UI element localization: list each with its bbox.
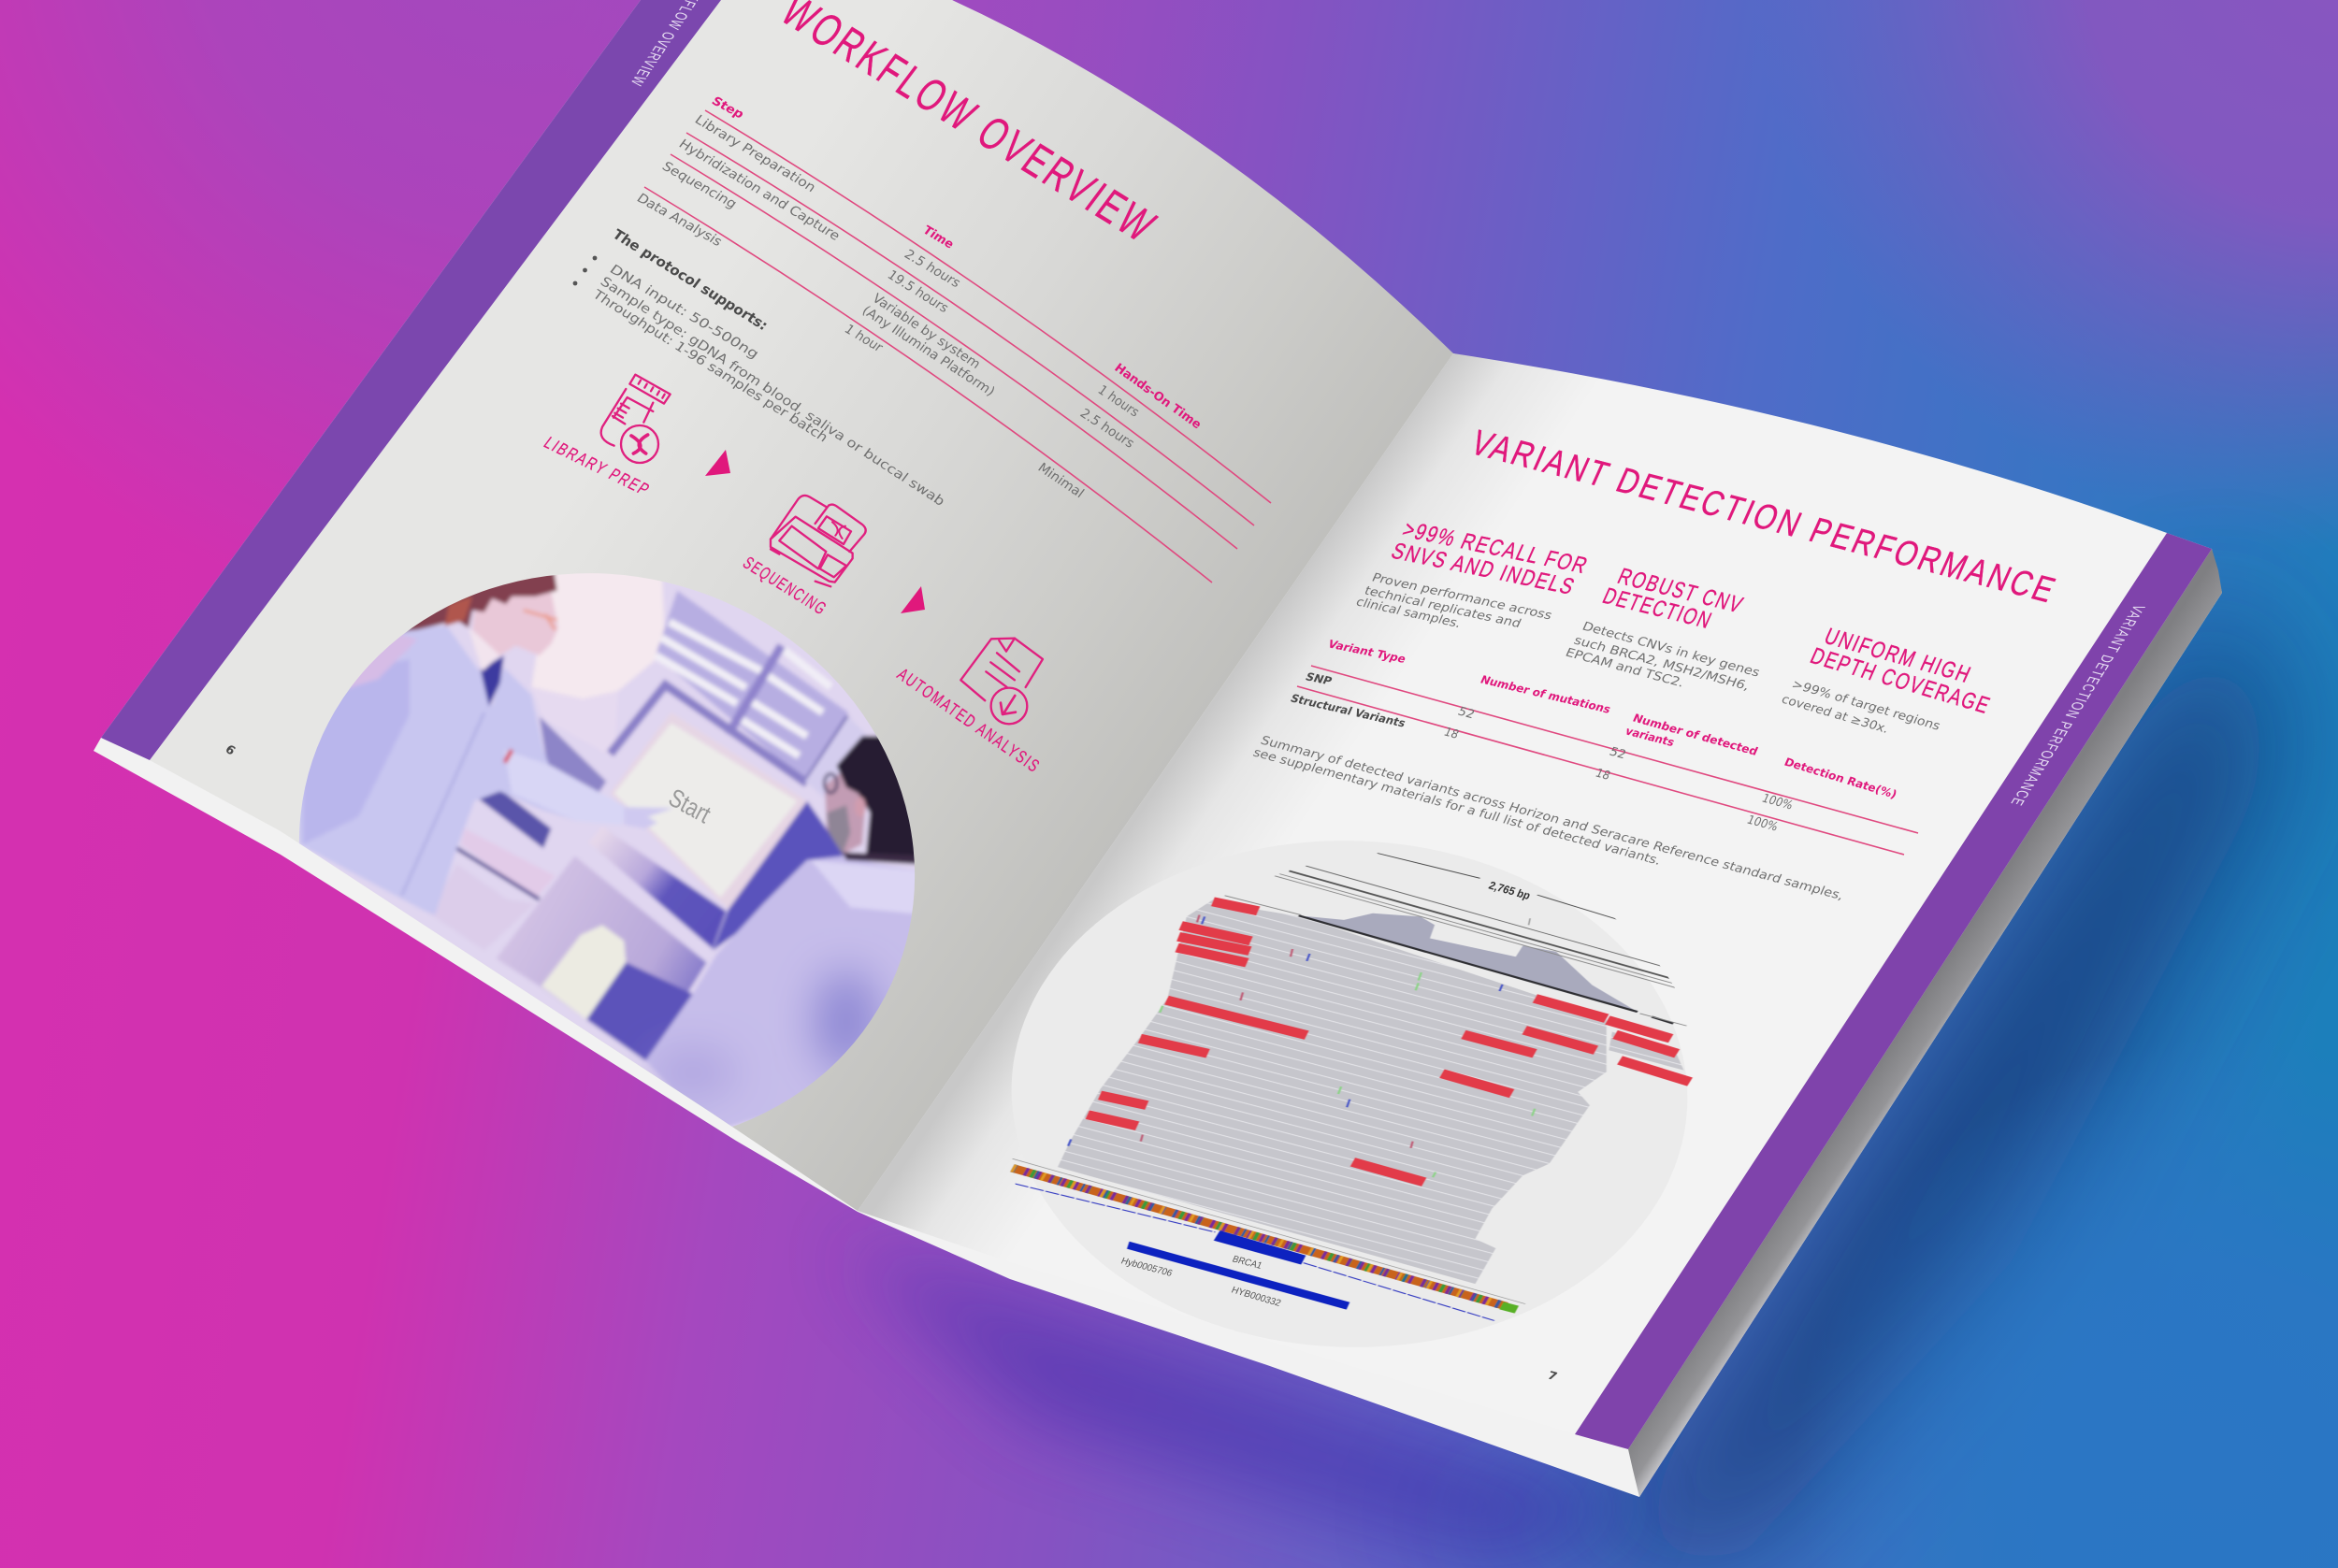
- workflow table: Variable by system: [870, 291, 983, 372]
- woman lab coat: [299, 625, 556, 914]
- variant table: Variant Type: [1326, 637, 1408, 666]
- icon: library prep tube: [601, 375, 671, 463]
- workflow table: (Any Illumina Platform): [859, 303, 998, 399]
- left purple strip: [101, 0, 721, 760]
- icon: automated analysis document: [960, 639, 1043, 724]
- variant table: 18: [1441, 725, 1461, 741]
- panel: genome browser circle: [920, 770, 1779, 1418]
- variant table: [1289, 637, 1918, 855]
- workflow table: Minimal: [1035, 460, 1087, 501]
- label: automated analysis: AUTOMATED ANALYSIS: [893, 665, 1044, 777]
- hair: [374, 554, 557, 634]
- probe label b: HYB000332: [1230, 1285, 1282, 1309]
- workflow table: 19.5 hours: [885, 267, 951, 316]
- gene model: [1015, 1184, 1494, 1320]
- feature: recall: technical replicates and: [1362, 584, 1523, 631]
- feature: recall: clinical samples.: [1353, 596, 1463, 631]
- workflow table: Time: [920, 223, 957, 252]
- feature: recall: Proven performance across: [1369, 571, 1554, 623]
- monitor: [634, 715, 804, 907]
- read pileup: [1058, 899, 1607, 1284]
- protocol supports list: [573, 226, 947, 510]
- probe label a: Hyb0005706: [1119, 1256, 1174, 1279]
- scale label: 2,765 bp: [1487, 879, 1533, 902]
- variant table: Number of mutations: [1479, 672, 1613, 716]
- genome browser reads and tracks: [1013, 853, 1690, 1320]
- arrow: to sequencing: [705, 450, 730, 476]
- variant table: 52: [1455, 704, 1477, 722]
- feature: cnv detection: [1563, 563, 1762, 694]
- variant table: 18: [1593, 766, 1612, 783]
- gene label: BRCA1: [1231, 1254, 1263, 1272]
- variant table: Detection Rate(%): [1782, 755, 1899, 801]
- variant table: 52: [1607, 744, 1628, 762]
- icon: sequencing machine: [771, 496, 866, 586]
- variant table: variants: [1624, 724, 1677, 749]
- label: sequencing: SEQUENCING: [739, 554, 830, 620]
- protocol supports list: DNA input: 50-500ng: [607, 262, 761, 362]
- panel: left page: [101, 0, 1453, 1211]
- page block edge: [1628, 549, 2222, 1497]
- feature: cnv detection: Detects CNVs in key genes: [1580, 619, 1762, 680]
- feature: depth coverage: [1779, 623, 1996, 737]
- workflow table: Hybridization and Capture: [676, 137, 843, 244]
- arrow: to analysis: [901, 586, 925, 613]
- protocol supports list: The protocol supports:: [610, 226, 772, 334]
- variant table: 100%: [1759, 791, 1796, 813]
- feature: depth coverage: DEPTH COVERAGE: [1807, 642, 1996, 719]
- feature: recall: >99% RECALL FOR: [1399, 518, 1593, 579]
- workflow table: 2.5 hours: [902, 247, 963, 291]
- table caption: Summary of detected variants across Horizon and Seracare Reference standard samples,: [1258, 733, 1846, 903]
- reference sequence: [1013, 1158, 1525, 1310]
- strip label: VARIANT DETECTION PERFORMANCE: [2007, 603, 2148, 808]
- variant table: SNP: [1304, 669, 1335, 687]
- workflow table: Step: [709, 94, 746, 122]
- page number 7: 7: [1546, 1368, 1559, 1383]
- feature: depth coverage: UNIFORM HIGH: [1821, 623, 1976, 688]
- label: library prep: LIBRARY PREP: [540, 434, 654, 500]
- feature: cnv detection: DETECTION: [1599, 583, 1717, 634]
- background wall: [531, 561, 665, 698]
- feature: depth coverage: covered at ≥30x.: [1779, 692, 1891, 737]
- protocol supports list: Sample type: gDNA from blood, saliva or buccal swab: [598, 274, 947, 510]
- table caption: see supplementary materials for a full list of detected variants.: [1250, 745, 1663, 869]
- feature: recall: [1353, 518, 1593, 631]
- right purple strip: [1575, 533, 2212, 1449]
- variant table: Structural Variants: [1289, 691, 1407, 729]
- workflow table: Data Analysis: [634, 191, 725, 250]
- man head: [825, 762, 866, 855]
- workflow table: 1 hours: [1095, 382, 1142, 420]
- hand: [624, 807, 673, 828]
- shirt: [481, 655, 504, 707]
- coverage track: [1299, 913, 1638, 1012]
- feature: recall: SNVS AND INDELS: [1388, 539, 1580, 599]
- photo: scientists at the sequencer: [299, 573, 915, 1127]
- workflow table: 2.5 hours: [1077, 406, 1137, 452]
- scale lines: [1225, 853, 1686, 1026]
- blinds: [656, 591, 848, 782]
- mismatch ticks: [1068, 915, 1535, 1177]
- workflow table: Sequencing: [659, 159, 740, 211]
- title: variant detection performance: VARIANT DETECTION PERFORMANCE: [1465, 422, 2064, 611]
- workflow table: Library Preparation: [692, 112, 818, 195]
- variant table: Number of detected: [1631, 711, 1760, 758]
- feature: depth coverage: >99% of target regions: [1789, 677, 1942, 733]
- face: [472, 593, 558, 655]
- feature: cnv detection: EPCAM and TSC2.: [1563, 645, 1686, 690]
- panel: right page: [858, 353, 2212, 1449]
- man lab coat: [645, 856, 929, 1131]
- feature: cnv detection: such BRCA2, MSH2/MSH6,: [1571, 633, 1752, 694]
- workflow table: Hands-On Time: [1112, 361, 1204, 432]
- red reads: [1088, 901, 1690, 1182]
- variant table: 100%: [1744, 813, 1781, 834]
- workflow table: [634, 94, 1271, 583]
- protocol supports list: Throughput: 1-96 samples per batch: [589, 287, 830, 445]
- feature: cnv detection: ROBUST CNV: [1614, 563, 1748, 618]
- page number 6: 6: [223, 742, 238, 758]
- workflow table: 1 hour: [842, 322, 886, 355]
- on-screen start label: Start: [664, 784, 715, 829]
- sequencer cabinet: [439, 870, 527, 946]
